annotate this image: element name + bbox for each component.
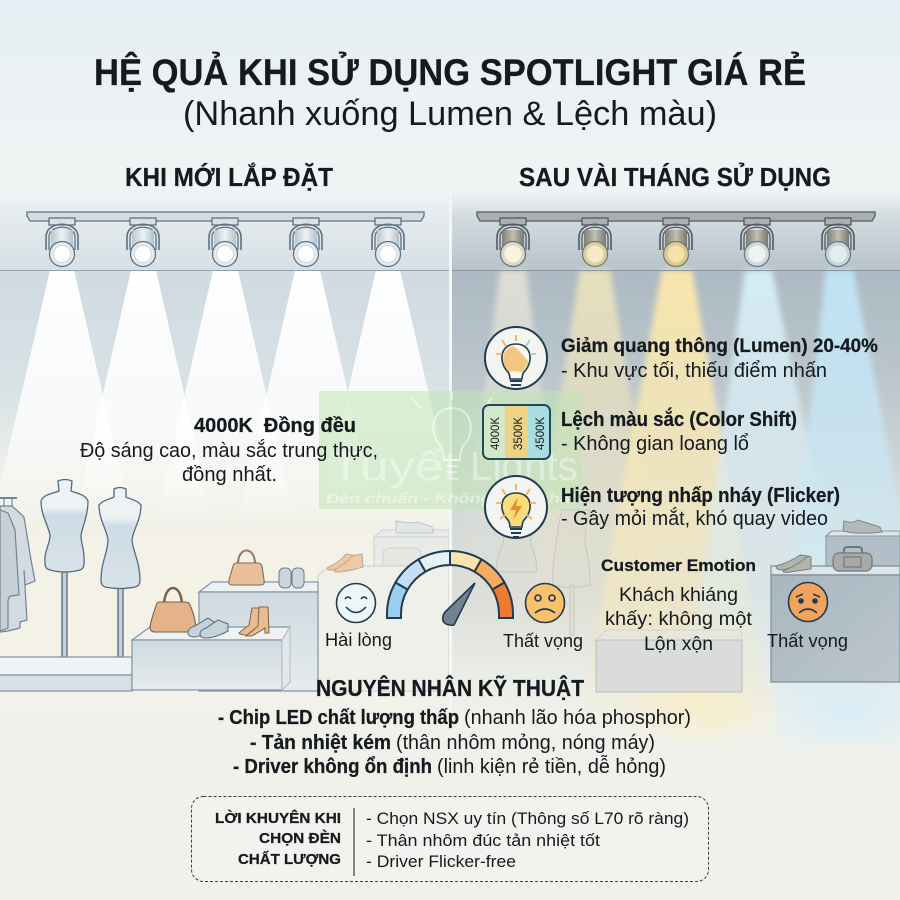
advice label bbox=[215, 809, 341, 868]
text block: technical causes: (linh kiện rẻ tiền, dễ hỏng) bbox=[437, 755, 666, 778]
icon: happy face bbox=[336, 584, 376, 622]
text block: customer emotion: Customer Emotion bbox=[601, 556, 756, 575]
floor platform bbox=[0, 657, 132, 691]
text block: 4000K uniform: 4000K Đồng đều bbox=[194, 415, 356, 437]
front block bbox=[771, 566, 900, 682]
text: lumen drop: Giảm quang thông (Lumen) 20-40% bbox=[561, 336, 878, 357]
text block: customer emotion bbox=[601, 556, 756, 655]
display block front bbox=[132, 627, 290, 690]
sneaker on back block bbox=[843, 520, 882, 533]
floor glow: blue bbox=[790, 690, 900, 734]
shoes front bbox=[188, 618, 228, 638]
text: colour shift: - Không gian loang lổ bbox=[561, 433, 749, 455]
heading: after months: SAU VÀI THÁNG SỬ DỤNG bbox=[519, 161, 831, 192]
panel: after months background bbox=[452, 190, 900, 730]
spotlights: aged bbox=[497, 218, 854, 266]
icon: upset face bbox=[788, 582, 828, 622]
watermark slogan: Đèn chuẩn - Không gian chất bbox=[326, 490, 578, 506]
divider strip between panels bbox=[449, 200, 452, 710]
icon: dim bulb bbox=[485, 327, 547, 389]
back block bbox=[826, 531, 900, 566]
text block: customer emotion: Khách khiáng bbox=[619, 585, 738, 606]
duffel bag bbox=[833, 547, 872, 571]
watermark name: Lights: Lights bbox=[470, 443, 578, 489]
text: flicker: - Gây mỏi mắt, khó quay video bbox=[561, 507, 828, 530]
advice list: - Chọn NSX uy tín (Thông số L70 rõ ràng) bbox=[366, 809, 689, 828]
text block: technical causes: - Driver không ổn định bbox=[233, 756, 432, 778]
title: HỆ QUẢ KHI SỬ DỤNG SPOTLIGHT GIÁ RẺ bbox=[94, 51, 806, 93]
advice label: CHẤT LƯỢNG bbox=[238, 851, 341, 868]
heading: technical causes: NGUYÊN NHÂN KỸ THUẬT bbox=[316, 674, 584, 701]
panel: left store scene bbox=[0, 212, 449, 691]
advice list: - Driver Flicker-free bbox=[366, 852, 516, 871]
text block: technical causes: - Tản nhiệt kém bbox=[250, 732, 391, 754]
text block: technical causes: (thân nhôm mỏng, nóng máy) bbox=[396, 732, 655, 754]
advice label: LỜI KHUYÊN KHI bbox=[215, 809, 341, 827]
icon: colour temperature swatches bbox=[483, 405, 550, 459]
display block faint bbox=[596, 630, 742, 692]
handbag front bbox=[150, 588, 196, 632]
display block right bbox=[318, 566, 449, 691]
text block: customer emotion: Lộn xộn bbox=[644, 634, 713, 655]
label: satisfied: Hài lòng bbox=[325, 630, 392, 650]
light beams: colour shift bbox=[456, 270, 900, 760]
icon: flicker bulb bbox=[485, 476, 547, 538]
background: page footer bbox=[0, 712, 900, 900]
clothes rack bbox=[0, 498, 35, 632]
shoes on front block bbox=[776, 555, 811, 572]
track rail bbox=[27, 212, 424, 221]
text block: 4000K uniform: đồng nhất. bbox=[182, 464, 277, 486]
display block back bbox=[374, 521, 449, 572]
icon: colour temperature swatches: 4000K bbox=[490, 417, 502, 450]
text: colour shift: Lệch màu sắc (Color Shift) bbox=[561, 407, 797, 431]
mannequin 1 bbox=[41, 480, 88, 670]
advice list bbox=[366, 809, 689, 871]
text block: technical causes bbox=[218, 707, 691, 778]
display block middle bbox=[199, 582, 318, 691]
panel: right store scene bbox=[452, 212, 900, 760]
advice label: CHỌN ĐÈN bbox=[259, 830, 341, 847]
tan shoes on right block bbox=[327, 554, 363, 572]
label: disappointed: Thất vọng bbox=[503, 631, 583, 651]
faint mannequins bbox=[497, 510, 590, 635]
text: lumen drop: - Khu vực tối, thiếu điểm nhấn bbox=[561, 360, 827, 382]
text: colour shift bbox=[561, 407, 797, 455]
gauge needle bbox=[443, 583, 475, 625]
panel: advice box bbox=[192, 796, 708, 882]
text block: customer emotion: khấy: không một bbox=[605, 609, 753, 630]
watermark name: Tuyết: Tuyết bbox=[330, 443, 459, 489]
text: flicker bbox=[561, 485, 840, 530]
handbag back bbox=[229, 550, 264, 585]
floor glow: yellow bbox=[640, 683, 760, 727]
icon: disappointed face bbox=[526, 584, 564, 622]
icon: colour temperature swatches: 4500K bbox=[535, 417, 547, 450]
text: lumen drop bbox=[561, 336, 878, 382]
light beams: uniform white bbox=[0, 270, 449, 525]
label: disappointed right: Thất vọng bbox=[767, 631, 848, 651]
track rail bbox=[477, 212, 875, 221]
subtitle: (Nhanh xuống Lumen & Lệch màu) bbox=[183, 95, 717, 133]
watermark: Tuyết Lights bbox=[319, 391, 582, 509]
shoes back bbox=[279, 568, 304, 588]
boots bbox=[239, 607, 269, 636]
background: page header bbox=[0, 0, 900, 200]
watermark bulb bbox=[412, 392, 492, 472]
ceiling line bbox=[452, 270, 900, 272]
text: flicker: Hiện tượng nhấp nháy (Flicker) bbox=[561, 485, 840, 507]
spotlights: new bbox=[46, 218, 404, 266]
heading: new install: KHI MỚI LẮP ĐẶT bbox=[125, 162, 333, 192]
gauge: customer emotion bbox=[387, 551, 513, 625]
mannequin 2 bbox=[99, 488, 141, 670]
advice list: - Thân nhôm đúc tản nhiệt tốt bbox=[366, 831, 600, 850]
text block: technical causes: (nhanh lão hóa phosphor) bbox=[464, 707, 691, 729]
text block: technical causes: - Chip LED chất lượng thấp bbox=[218, 707, 459, 729]
icon: colour temperature swatches: 3500K bbox=[513, 417, 525, 450]
text block: 4000K uniform: Độ sáng cao, màu sắc trung thực, bbox=[80, 439, 378, 462]
ceiling line bbox=[0, 270, 449, 272]
panel: new installation background bbox=[0, 190, 449, 720]
text block: 4000K uniform bbox=[80, 415, 378, 486]
